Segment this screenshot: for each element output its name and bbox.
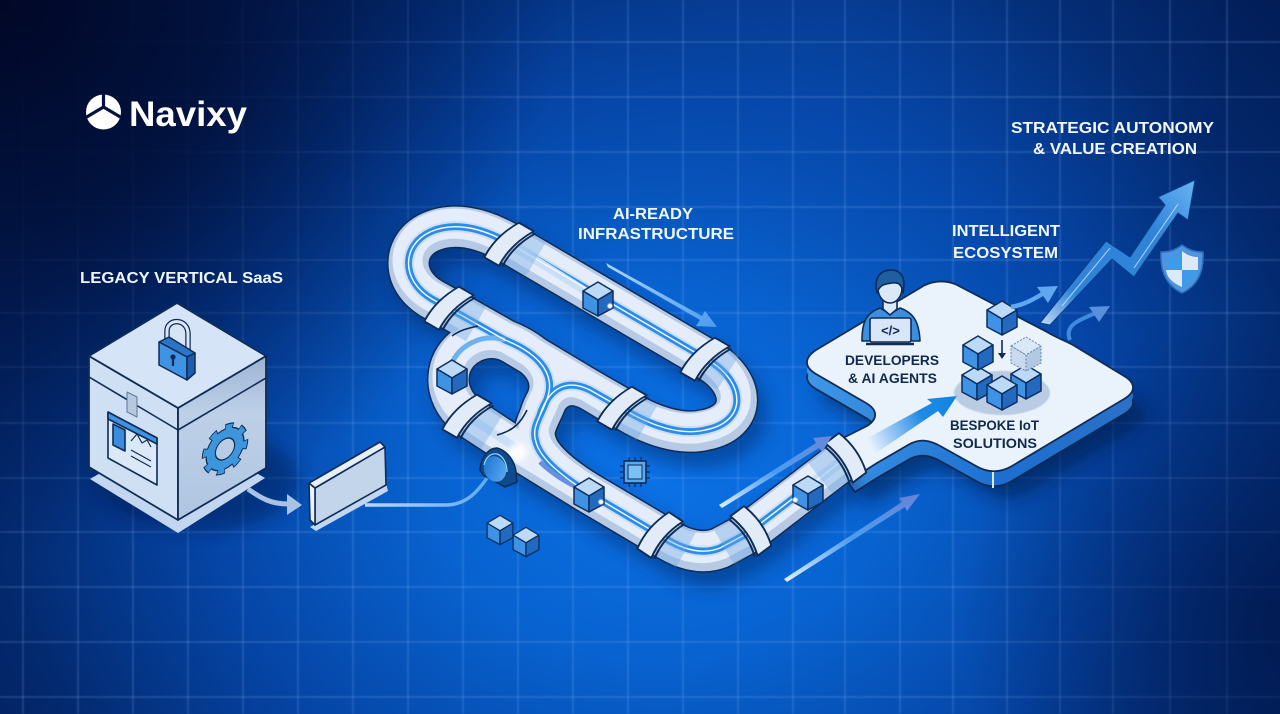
pipe shadow [416, 241, 851, 565]
legacy box [89, 303, 300, 533]
icon: browser window [108, 412, 157, 485]
icon: chip [620, 457, 650, 487]
label: AI-ready infrastructure [578, 206, 734, 243]
cube glints [598, 304, 798, 504]
flow core [408, 227, 843, 551]
ghost cube [1011, 337, 1041, 371]
label: bespoke IoT solutions: SOLUTIONS [953, 436, 1037, 451]
platform top [807, 281, 1133, 477]
arrow: box to gateway [248, 489, 302, 515]
label: developers and AI agents: & AI AGENTS [848, 371, 937, 386]
flow line [408, 227, 843, 551]
icon: developer: </> [881, 323, 900, 338]
arrow: flow lower 2 [784, 494, 920, 582]
loose cubes [487, 515, 539, 557]
pipe body [408, 227, 843, 551]
flow line faded sections [470, 245, 845, 485]
arrow: cube drop [998, 340, 1006, 359]
arrow: along infrastructure [606, 263, 717, 327]
icon: shield [1161, 245, 1203, 293]
platform shadow [821, 309, 1147, 505]
inlet port [480, 448, 517, 487]
base plate [90, 428, 265, 533]
flow channel [408, 227, 843, 551]
arrow on platform [864, 396, 957, 453]
icon: padlock [159, 322, 195, 380]
icon: developer [862, 270, 920, 344]
pipe couplings [421, 221, 869, 560]
glass sections [452, 245, 843, 550]
right face [178, 356, 266, 520]
tape [127, 392, 137, 417]
label: intelligent ecosystem: INTELLIGENT [952, 223, 1060, 240]
label: strategic autonomy and value creation: STRATEGIC AUTONOMY [1011, 120, 1214, 137]
label: AI-ready infrastructure: AI-READY [613, 206, 693, 223]
cube assembly [954, 301, 1050, 415]
label: strategic autonomy and value creation [1011, 120, 1214, 158]
data cubes in pipes [437, 282, 823, 512]
label: developers and AI agents: DEVELOPERS [845, 353, 939, 368]
platform [807, 281, 1147, 505]
junction glow [509, 443, 527, 461]
top face [89, 303, 266, 408]
label: AI-ready infrastructure: INFRASTRUCTURE [578, 226, 734, 243]
icon: gear [205, 419, 245, 479]
gateway panel [309, 442, 388, 531]
label: intelligent ecosystem [952, 223, 1060, 262]
logo icon [85, 93, 122, 130]
connector line to inlet [365, 468, 494, 505]
lid seam [89, 377, 266, 430]
left face [89, 356, 178, 520]
platform seam [992, 472, 994, 488]
label: bespoke IoT solutions [950, 418, 1040, 451]
junction seams [452, 326, 527, 435]
pipe outline [408, 227, 843, 551]
growth arrow [1040, 180, 1195, 325]
small arrow 1 [1011, 286, 1058, 307]
logo: Navixy [85, 93, 248, 134]
small arrow 2 [1069, 306, 1110, 340]
label: intelligent ecosystem: ECOSYSTEM [953, 245, 1058, 262]
platform side [807, 289, 1133, 492]
pipeline [408, 224, 851, 565]
label: legacy vertical SaaS: LEGACY VERTICAL SaaS [80, 270, 283, 287]
cube shadow [954, 371, 1050, 415]
logo wordmark: Navixy [129, 95, 248, 134]
label: strategic autonomy and value creation: & VALUE CREATION [1033, 141, 1197, 158]
box shadow [100, 430, 300, 530]
pipe highlight [408, 224, 842, 548]
label: bespoke IoT solutions: BESPOKE IoT [950, 418, 1040, 433]
label: developers and AI agents [845, 353, 939, 386]
arrow: flow lower 1 [719, 436, 832, 508]
